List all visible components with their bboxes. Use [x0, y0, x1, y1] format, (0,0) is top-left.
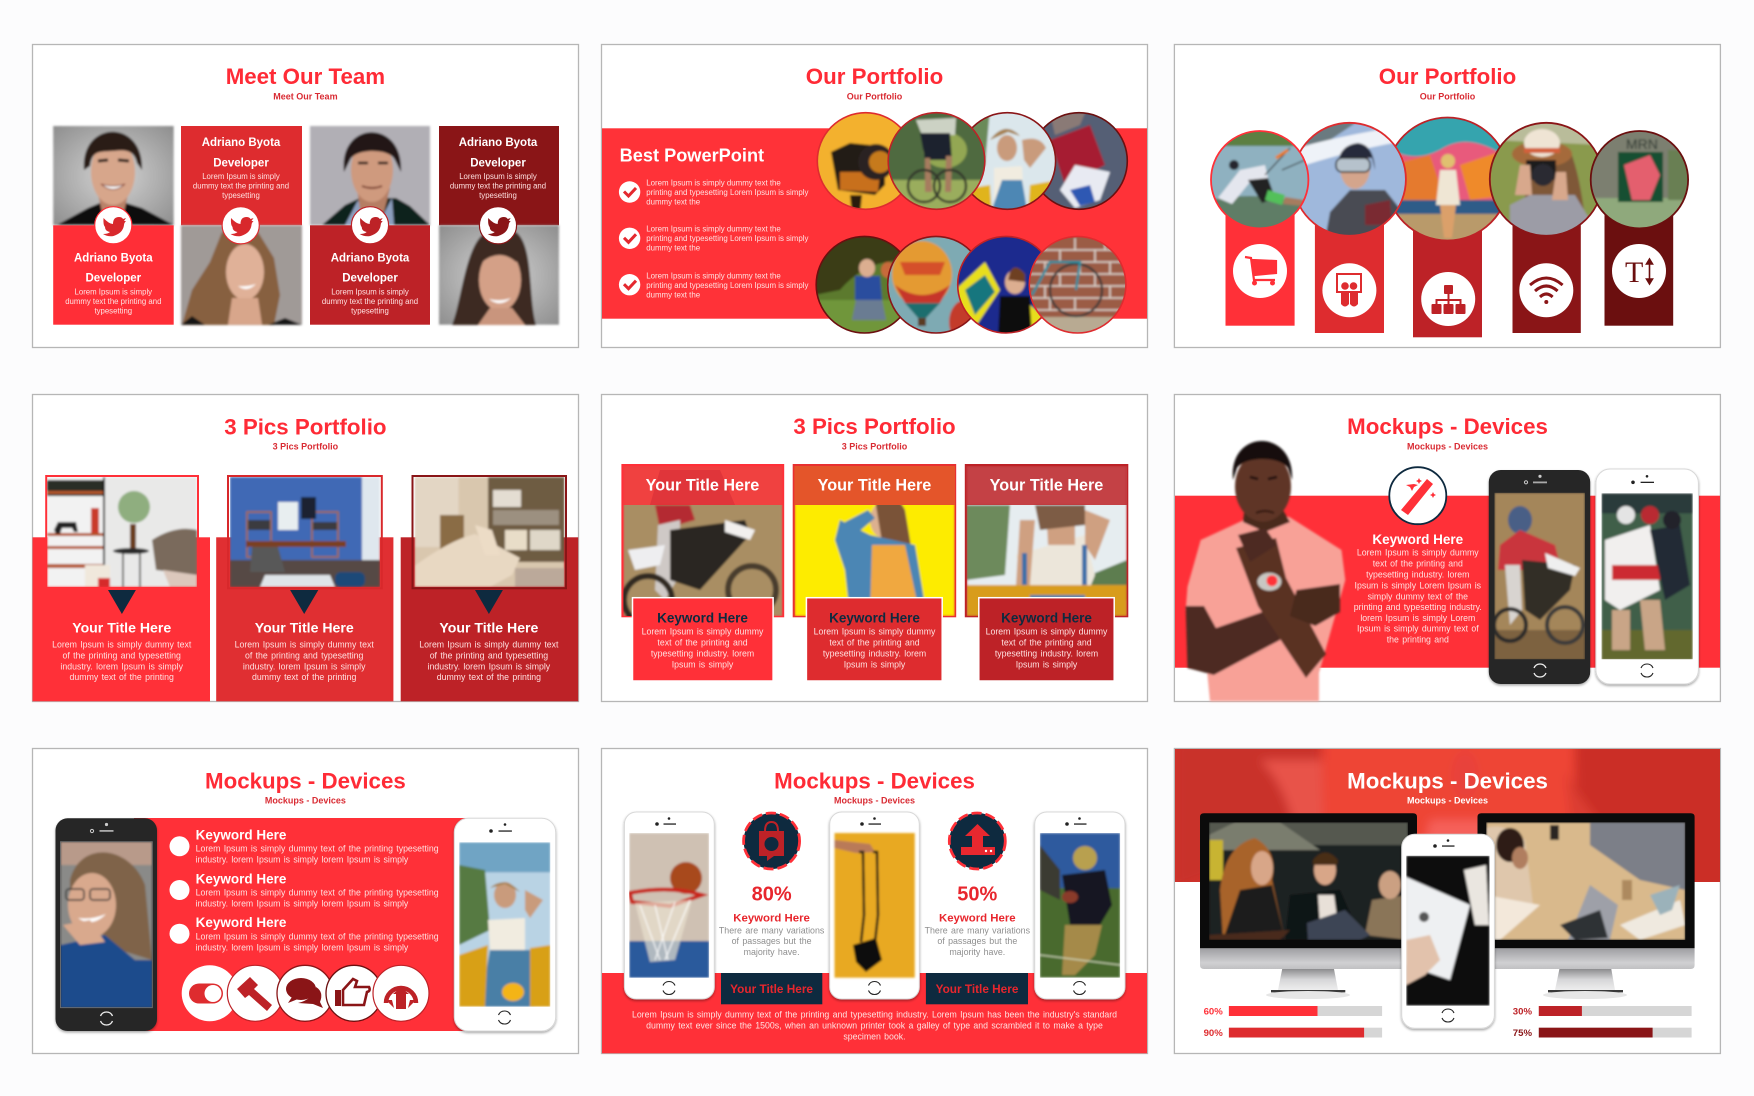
team card 4: red text block and woman: typesetting: [479, 191, 517, 200]
list item 2: Lorem Ipsum is simply dummy text of the printing typesetting: [196, 888, 439, 898]
team card 2: red text block and woman: Lorem Ipsum is simply: [202, 172, 280, 181]
panel: 3 pics portfolio with triangles: [32, 394, 578, 702]
stat 1: 80 percent: majority have.: [744, 947, 800, 957]
team card 3: man and red text block: [310, 126, 430, 325]
subtitle: meet our team: Meet Our Team: [273, 91, 338, 101]
label box 1: Your Title Here: [730, 982, 813, 996]
checklist item 3: [619, 271, 809, 299]
stat 2: 50 percent: [925, 813, 1031, 957]
title: mockups devices: Mockups - Devices: [205, 768, 406, 793]
progress bar 75 percent: 75%: [1513, 1028, 1532, 1039]
team card 2: red text block and woman: Adriano Byota: [202, 137, 281, 149]
progress bar 90 percent: [1204, 1028, 1382, 1039]
team card 1: man and red text block: Developer: [85, 273, 142, 285]
photo card 2: woman on yellow: Lorem Ipsum is simply dummy: [814, 627, 936, 637]
stat 1: 80 percent: 80%: [752, 884, 792, 906]
icon: shopping cart: [1233, 244, 1287, 298]
checklist item 3: Lorem Ipsum is simply dummy text the: [646, 271, 781, 280]
label box 1: [721, 973, 822, 1004]
text: keyword block: typesetting industry. lorem: [1366, 569, 1469, 579]
team card 3: man and red text block: Developer: [342, 273, 398, 285]
subtitle: mockups devices: Mockups - Devices: [265, 795, 346, 805]
photo card 1: motocross: typesetting industry. lorem: [651, 648, 754, 658]
checklist item 3: printing and typesetting Lorem Ipsum is simply: [646, 281, 809, 290]
column 2: blue office: [216, 476, 393, 701]
panel: mockups with keyword list: [32, 748, 578, 1054]
icon: wifi: [1519, 263, 1573, 317]
panel: mockups with stats: [602, 748, 1148, 1054]
photo: graffiti: [1590, 130, 1693, 230]
list item 2: industry. lorem Ipsum is simply lorem Ipsum is simply: [196, 899, 409, 909]
team card 1: man and red text block: Lorem Ipsum is simply: [75, 287, 152, 296]
list item 3: industry. lorem Ipsum is simply lorem Ipsum is simply: [196, 942, 409, 952]
label box 2: [926, 973, 1028, 1004]
photo card 1: motocross: Keyword Here: [657, 611, 748, 626]
checklist item 2: printing and typesetting Lorem Ipsum is simply: [646, 234, 809, 243]
progress bar 30 percent: 30%: [1513, 1006, 1532, 1017]
column 2: blue office: of the printing and typesetting: [245, 650, 364, 660]
label box 2: Your Title Here: [936, 982, 1019, 996]
photo card 2: woman on yellow: Ipsum is simply: [844, 659, 906, 669]
title: 3 pics portfolio: 3 Pics Portfolio: [224, 414, 387, 439]
column 1: shelf room: industry. lorem Ipsum is simply: [60, 661, 184, 671]
subtitle: our portfolio: Our Portfolio: [847, 91, 903, 101]
progress bar 60 percent: [1204, 1006, 1382, 1017]
team card 4: red text block and woman: [439, 126, 559, 325]
column 1: shelf room: Your Title Here: [72, 620, 171, 636]
panel: mockups with monitors: [1174, 740, 1730, 1054]
panel: our portfolio columns: [1174, 44, 1720, 348]
team card 4: red text block and woman: Developer: [470, 157, 526, 169]
photo card 3: woman with flowers: Your Title Here: [990, 477, 1103, 495]
photo card 1: motocross: [621, 464, 784, 681]
phone: white with woman and flowers: [454, 818, 556, 1031]
footer paragraph: dummy text ever since the 1500s, when an unknown printer took a galley of type and scrambled it to make a type: [646, 1020, 1103, 1030]
icon: magic wand badge: [1389, 467, 1446, 524]
checklist item 1: [619, 178, 809, 206]
photo card 2: woman on yellow: Your Title Here: [818, 477, 931, 495]
stat 2: 50 percent: of passages but the: [937, 936, 1017, 946]
team card 1: man and red text block: [53, 126, 174, 325]
stat 2: 50 percent: There are many variations: [925, 925, 1031, 935]
column 2: blue office: dummy text of the printing: [252, 672, 356, 682]
checklist item 1: dummy text the: [646, 197, 701, 206]
text: keyword block: [1354, 532, 1482, 645]
subtitle: mockups devices: Mockups - Devices: [1407, 441, 1488, 451]
stat 2: 50 percent: majority have.: [949, 947, 1005, 957]
text: keyword block: text of the printing and: [1373, 559, 1463, 569]
title: mockups devices: Mockups - Devices: [1347, 414, 1548, 439]
team card 4: red text block and woman: dummy text the printing and: [450, 182, 546, 191]
footer paragraph: specimen book.: [843, 1031, 906, 1041]
list item 3: [170, 915, 439, 952]
list item 2: Keyword Here: [196, 872, 287, 887]
column 3: living room: Your Title Here: [439, 620, 539, 636]
red band: [602, 128, 1147, 319]
column 3: living room: industry. lorem Ipsum is simply: [428, 661, 551, 671]
red band: [134, 818, 476, 1031]
photo card 3: woman with flowers: Ipsum is simply: [1016, 659, 1078, 669]
phone: dark motocross: [1489, 470, 1590, 684]
photo card 3: woman with flowers: text of the printing and: [1001, 638, 1092, 648]
column 1: shelf room: Lorem Ipsum is simply dummy text: [52, 639, 192, 649]
checklist item 3: dummy text the: [646, 290, 701, 299]
text: keyword block: Lorem Ipsum is simply dummy: [1357, 548, 1479, 558]
team card 2: red text block and woman: dummy text the printing and: [193, 182, 289, 191]
team card 1: man and red text block: dummy text the printing and: [65, 297, 161, 306]
subtitle: mockups devices: Mockups - Devices: [1407, 795, 1488, 805]
icon: text height: T: [1625, 256, 1643, 289]
text: keyword block: Ipsum is simply Lorem Ipsum is: [1355, 580, 1482, 590]
checklist item 1: Lorem Ipsum is simply dummy text the: [646, 178, 781, 187]
stat 1: 80 percent: [719, 813, 825, 957]
photo card 1: motocross: text of the printing and: [657, 638, 748, 648]
text: keyword block: simply dummy text of the: [1368, 591, 1468, 601]
checklist item 2: dummy text the: [646, 243, 701, 252]
photo: man in pink shirt: [1186, 441, 1345, 701]
panel: mockups with man and phones: [1174, 394, 1720, 702]
text: keyword block: printing and typesetting industry.: [1354, 602, 1482, 612]
team card 2: red text block and woman: [181, 126, 302, 325]
red photo header: [1175, 749, 1720, 882]
subtitle: mockups devices: Mockups - Devices: [834, 795, 915, 805]
column 1: shelf room: [32, 476, 210, 701]
footer paragraph: Lorem Ipsum is simply dummy text of the printing and typesetting industry. Lorem Ipsum has been the industry's standard: [632, 1010, 1117, 1020]
phone: camera on yellow: [830, 812, 919, 999]
team card 3: man and red text block: Adriano Byota: [331, 252, 410, 264]
photo card 2: woman on yellow: text of the printing and: [829, 638, 920, 648]
panel: meet our team: [32, 44, 578, 348]
team card 4: red text block and woman: Lorem Ipsum is simply: [459, 172, 537, 181]
stat 1: 80 percent: There are many variations: [719, 925, 825, 935]
footer paragraph: [632, 1010, 1117, 1041]
red band: [1175, 496, 1720, 668]
panel: 3 pics portfolio with keyword boxes: [602, 394, 1148, 702]
team card 2: red text block and woman: typesetting: [222, 191, 260, 200]
team card 3: man and red text block: Lorem Ipsum is simply: [331, 287, 409, 296]
icon: slideshare: [1322, 263, 1376, 317]
monitor left: [1200, 813, 1417, 999]
progress bar 75 percent: [1513, 1028, 1692, 1039]
icon: text height: [1612, 244, 1666, 298]
column 3: living room: of the printing and typesetting: [430, 650, 548, 660]
column 3: living room: dummy text of the printing: [437, 672, 541, 682]
coloured column bars: [1226, 180, 1673, 337]
photo card 3: woman with flowers: Keyword Here: [1001, 611, 1092, 626]
photo: graffiti: MRN: [1626, 136, 1658, 152]
title: 3 pics portfolio: 3 Pics Portfolio: [793, 414, 956, 439]
column 2: blue office: Lorem Ipsum is simply dummy text: [235, 639, 374, 649]
stat 2: 50 percent: 50%: [957, 884, 998, 906]
text: keyword block: the printing and: [1387, 635, 1449, 645]
team card 3: man and red text block: typesetting: [351, 306, 389, 315]
progress bar 30 percent: [1513, 1006, 1692, 1017]
list item 3: Keyword Here: [196, 915, 287, 930]
title: our portfolio: Our Portfolio: [1379, 64, 1516, 89]
photo: photographer: [1488, 122, 1598, 235]
title: mockups devices: Mockups - Devices: [1347, 768, 1548, 793]
monitor right: [1478, 813, 1695, 999]
photo card 1: motocross: Lorem Ipsum is simply dummy: [642, 627, 764, 637]
icon row: toggle, gavel, chat, thumb, headphones: [182, 965, 429, 1021]
column 3: living room: [401, 476, 578, 701]
heading: best powerpoint: Best PowerPoint: [620, 145, 764, 165]
phone: documents: [1402, 834, 1494, 1028]
column 2: blue office: Your Title Here: [255, 620, 354, 636]
team card 1: man and red text block: Adriano Byota: [74, 252, 153, 264]
phone: football player: [1035, 812, 1125, 999]
stat 2: 50 percent: Keyword Here: [939, 913, 1016, 925]
subtitle: 3 pics portfolio: 3 Pics Portfolio: [273, 442, 339, 452]
progress bar 90 percent: 90%: [1204, 1028, 1223, 1039]
title: mockups devices: Mockups - Devices: [774, 768, 975, 793]
photo card 3: woman with flowers: Lorem Ipsum is simply dummy: [986, 627, 1108, 637]
team card 4: red text block and woman: Adriano Byota: [459, 137, 538, 149]
icon: hierarchy: [1421, 272, 1475, 326]
column 3: living room: Lorem Ipsum is simply dummy text: [419, 639, 559, 649]
title: our portfolio: Our Portfolio: [806, 64, 943, 89]
list item 3: Lorem Ipsum is simply dummy text of the printing typesetting: [196, 931, 439, 941]
list item 2: [170, 872, 439, 909]
team card 3: man and red text block: dummy text the printing and: [322, 297, 418, 306]
column 2: blue office: industry. lorem Ipsum is simply: [243, 661, 366, 671]
photo card 3: woman with flowers: typesetting industry. lorem: [995, 648, 1098, 658]
checklist item 1: printing and typesetting Lorem Ipsum is simply: [646, 188, 809, 197]
photo: skier: [1300, 122, 1407, 235]
phone: basketball: [624, 812, 714, 999]
text: keyword block: Ipsum is simply dummy text of: [1357, 624, 1479, 634]
list item 1: [170, 828, 439, 865]
photo card 2: woman on yellow: [793, 464, 956, 681]
phone: white lacrosse team: [1596, 469, 1698, 684]
photo: mural: [1395, 116, 1500, 240]
photo circle row 1: [815, 110, 1130, 215]
photo: kite surfer: [1210, 130, 1310, 230]
text: keyword block: lorem Ipsum is simply Lorem: [1360, 613, 1475, 623]
photo card 3: woman with flowers: [965, 464, 1128, 681]
text: keyword block: Keyword Here: [1372, 532, 1464, 547]
title: meet our team: Meet Our Team: [226, 64, 385, 89]
list item 1: Keyword Here: [196, 828, 287, 843]
red band: [602, 973, 1147, 1053]
photo card 2: woman on yellow: typesetting industry. lorem: [823, 648, 926, 658]
panel: our portfolio circles: [602, 44, 1148, 348]
photo circle row 2: [815, 235, 1128, 344]
column 1: shelf room: dummy text of the printing: [70, 672, 174, 682]
list item 1: industry. lorem Ipsum is simply lorem Ipsum is simply: [196, 855, 409, 865]
progress bar 60 percent: 60%: [1204, 1006, 1223, 1017]
photo card 1: motocross: Ipsum is simply: [672, 659, 734, 669]
list item 1: Lorem Ipsum is simply dummy text of the printing typesetting: [196, 844, 439, 854]
photo card 1: motocross: Your Title Here: [646, 477, 759, 495]
team card 1: man and red text block: typesetting: [94, 306, 132, 315]
checklist item 2: [619, 224, 809, 252]
stat 1: 80 percent: Keyword Here: [733, 913, 810, 925]
icons: twitter badges: [95, 207, 517, 244]
subtitle: 3 pics portfolio: 3 Pics Portfolio: [842, 441, 908, 451]
column 1: shelf room: of the printing and typesetting: [62, 650, 181, 660]
checklist item 2: Lorem Ipsum is simply dummy text the: [646, 224, 781, 233]
subtitle: our portfolio: Our Portfolio: [1420, 91, 1476, 101]
stat 1: 80 percent: of passages but the: [732, 936, 812, 946]
team card 2: red text block and woman: Developer: [213, 157, 269, 169]
phone: dark with smiling woman: [56, 818, 157, 1031]
photo card 2: woman on yellow: Keyword Here: [829, 611, 920, 626]
